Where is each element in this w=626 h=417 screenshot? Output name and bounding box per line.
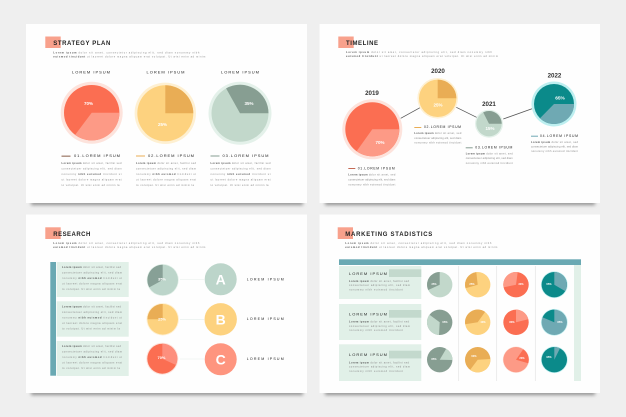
pie row 3 column 2: 60% — [471, 354, 477, 358]
panel: marketing statistics — [320, 214, 600, 393]
pie row 2 column 3 — [503, 310, 529, 335]
text box 1: consectetuer adipiscing elit, sed diam — [62, 270, 122, 274]
letter circle A — [205, 263, 237, 295]
intro text: Lorem ipsum dolor sit amet, consectetur adipiscing elit, sed diam nonummy nibh — [346, 50, 493, 54]
text box 1: nonummy nibh euismod tincidunt ut — [62, 276, 122, 280]
pie row 1 column 4 — [541, 271, 568, 298]
column text 3 — [210, 153, 271, 187]
intro text — [346, 50, 498, 58]
table row label 2: consectetuer adipiscing elit, sed diam — [349, 324, 410, 328]
pie chart: 2022 — [532, 82, 576, 126]
pie chart: 2019: 70% — [375, 140, 385, 145]
pie chart: 35%: 35% — [244, 101, 254, 106]
heading accent — [338, 227, 353, 239]
column text 2 — [136, 153, 197, 187]
pie row 3 column 3: 20% — [519, 356, 525, 360]
timeline text 2020: consectetuer adipiscing elit, sed diam — [414, 136, 461, 140]
column text 2: consectetuer adipiscing elit, sed diam — [136, 166, 196, 170]
timeline text 2021 — [466, 146, 513, 165]
text box 1: ut laoreet dolore magna aliquam erat — [62, 281, 122, 285]
table row label 3: nonummy nibh euismod tincidunt — [349, 369, 403, 373]
column text 1: ut laoreet dolore magna aliquam erat — [62, 178, 122, 182]
column text 3: 03.LOREM IPSUM — [222, 153, 268, 158]
pie row 2 column 4 — [541, 309, 568, 336]
pie chart: 35% — [208, 82, 272, 145]
year 2020: 2020 — [431, 68, 445, 75]
column heading 1: LOREM IPSUM — [72, 70, 110, 74]
pie row 1 column 4: 65% — [546, 282, 552, 286]
timeline text 2020: nonummy nibh euismod tincidunt — [414, 140, 462, 144]
heading accent — [45, 227, 61, 239]
column text 2: ut laoreet dolore magna aliquam erat — [136, 178, 196, 182]
pie chart C: 70% — [157, 355, 166, 360]
pie row 1 column 1 — [427, 272, 452, 297]
row label B: LOREM IPSUM — [247, 317, 284, 321]
row label C: LOREM IPSUM — [247, 357, 284, 361]
pie row 2 column 4: 85% — [557, 320, 563, 324]
panel: timeline — [320, 24, 600, 203]
timeline text 2020: 02.LOREM IPSUM — [424, 125, 461, 129]
year 2022: 2022 — [548, 72, 562, 80]
row label A: LOREM IPSUM — [247, 278, 284, 282]
pie row 3 column 4 — [541, 346, 568, 373]
pie chart: 2020 — [417, 78, 458, 119]
intro text — [345, 241, 497, 249]
timeline text 2019: Lorem ipsum dolor sit amet, sed — [348, 172, 396, 176]
timeline text 2021: consectetuer adipiscing elit, sed diam — [466, 156, 513, 160]
pie chart A — [147, 264, 179, 296]
column heading 3: LOREM IPSUM — [221, 70, 259, 74]
pie chart A: 35% — [158, 276, 166, 282]
timeline text 2022 — [531, 134, 579, 153]
intro text: Lorem ipsum dolor sit amet, consectetur adipiscing elit, sed diam nonummy nibh — [345, 241, 492, 245]
column text 1: consectetuer adipiscing elit, sed diam — [62, 166, 122, 170]
pie row 1 column 1: 35% — [431, 282, 437, 286]
column text 3: consectetuer adipiscing elit, sed diam — [210, 166, 270, 170]
pie chart: 25%: 25% — [158, 122, 167, 127]
timeline text 2020 — [414, 125, 462, 144]
intro text: Lorem ipsum dolor sit amet, consectetur adipiscing elit, sed diam nonummy nibh — [53, 50, 200, 54]
heading accent — [45, 36, 61, 48]
text box 3: ut laoreet dolore magna aliquam erat — [62, 360, 122, 364]
table row label 1: Lorem ipsum dolor sit amet, facilisi sed — [349, 279, 410, 283]
table row label 3: consectetuer adipiscing elit, sed diam — [349, 364, 410, 368]
timeline text 2022: nonummy nibh euismod tincidunt — [531, 149, 578, 153]
pie row 2 column 3: 80% — [509, 320, 515, 324]
column text 1: Lorem ipsum dolor sit amet, facilisi sed — [62, 161, 122, 165]
pie row 2 column 1: 65% — [442, 320, 448, 324]
pie row 3 column 2 — [465, 347, 490, 372]
column heading 2: LOREM IPSUM — [146, 70, 184, 74]
pie row 1 column 3: 30% — [518, 282, 524, 286]
timeline text 2019: nonummy nibh euismod tincidunt — [348, 182, 396, 186]
table row label 1: LOREM IPSUM — [349, 271, 387, 276]
panel: strategy plan — [26, 24, 307, 203]
column text 2: nonummy nibh euismod tincidunt ut — [136, 172, 196, 176]
heading: research: RESEARCH — [53, 232, 90, 238]
pie row 1 column 2: 25% — [469, 282, 475, 286]
pie grid — [427, 271, 568, 373]
pie row 2 column 1 — [427, 310, 452, 335]
year 2021: 2021 — [482, 101, 496, 108]
table row label 1 — [339, 266, 421, 299]
text box 2: nonummy nibh euismod tincidunt ut — [62, 315, 122, 319]
column text 3: ut laoreet dolore magna aliquam erat — [210, 178, 271, 182]
table header bar — [339, 259, 581, 265]
table row label 3: Lorem ipsum dolor sit amet, facilisi sed — [349, 360, 410, 364]
column text 1: 01.LOREM IPSUM — [74, 153, 120, 158]
timeline text 2022: 04.LOREM IPSUM — [540, 134, 578, 138]
table row label 2: Lorem ipsum dolor sit amet, facilisi sed — [349, 320, 410, 324]
text box 2: consectetuer adipiscing elit, sed diam — [62, 310, 122, 314]
text box 2: ut laoreet dolore magna aliquam erat — [62, 321, 122, 325]
pie row 3 column 4: 95% — [546, 355, 552, 359]
heading accent — [338, 36, 354, 48]
intro text: Lorem ipsum dolor sit amet, consectetur adipiscing elit, sed diam nonummy nibh — [53, 241, 200, 245]
pie chart: 70%: 70% — [84, 101, 93, 106]
text box 1: Lorem ipsum dolor sit amet, facilisi sed — [62, 265, 122, 269]
table row label 3: LOREM IPSUM — [349, 352, 387, 357]
vertical bar — [50, 262, 56, 376]
panel: research — [26, 214, 307, 393]
text box 3 — [57, 341, 129, 376]
timeline text 2021: nonummy nibh euismod tincidunt — [466, 161, 513, 165]
timeline text 2021: 03.LOREM IPSUM — [475, 146, 512, 150]
year 2019: 2019 — [365, 90, 379, 97]
table right strip — [574, 265, 581, 381]
table row label 2 — [339, 304, 421, 340]
table row label 1: nonummy nibh euismod tincidunt — [349, 288, 403, 292]
heading: timeline: TIMELINE — [346, 41, 378, 47]
text box 3: consectetuer adipiscing elit, sed diam — [62, 350, 122, 354]
timeline text 2022: consectetuer adipiscing elit, sed diam — [531, 144, 578, 148]
timeline text 2020: Lorem ipsum dolor sit amet, sed — [414, 131, 462, 135]
text box 1: to volutpat. Ut wisi enim ad minim la — [62, 287, 121, 291]
table row label 2: LOREM IPSUM — [349, 312, 387, 316]
row connectors — [180, 280, 204, 359]
connector lines — [401, 107, 532, 119]
table row label 2: nonummy nibh euismod tincidunt — [349, 328, 403, 332]
timeline text 2019: consectetuer adipiscing elit, sed diam — [348, 178, 395, 182]
timeline text 2019: 01.LOREM IPSUM — [358, 167, 395, 171]
pie chart B — [146, 303, 179, 335]
column text 3: Lorem ipsum dolor sit amet, facilisi sed — [210, 161, 271, 165]
text box 3: nonummy nibh euismod tincidunt ut — [62, 355, 122, 359]
table row label 1: consectetuer adipiscing elit, sed diam — [349, 283, 410, 287]
letter circle C — [205, 343, 237, 375]
pie chart: 70% — [61, 82, 123, 144]
pie row 3 column 3 — [503, 346, 529, 373]
pie chart: 2021 — [475, 110, 503, 138]
column text 1: to volutpat. Ut wisi enim ad minim la — [62, 183, 120, 187]
letter circle A: A — [216, 272, 226, 288]
pie row 2 column 2: 40% — [480, 320, 486, 324]
letter circle C: C — [216, 352, 226, 368]
timeline text 2021: Lorem ipsum dolor sit amet, sed — [466, 152, 513, 156]
text box 1 — [57, 262, 129, 297]
pie chart B: 25% — [158, 316, 166, 322]
column text 2: 02.LOREM IPSUM — [148, 153, 194, 158]
text box 2: Lorem ipsum dolor sit amet, facilisi sed — [62, 304, 122, 308]
text box 3: Lorem ipsum dolor sit amet, facilisi sed — [62, 344, 122, 348]
timeline text 2022: Lorem ipsum dolor sit amet, sed — [531, 140, 579, 144]
timeline text 2019 — [348, 167, 396, 186]
pie row 1 column 2 — [465, 272, 490, 297]
pie row 2 column 2 — [465, 310, 490, 335]
pie row 3 column 1 — [427, 347, 452, 372]
letter circle B — [204, 303, 237, 335]
heading: strategy plan: STRATEGY PLAN — [53, 41, 110, 47]
pie chart: 2021: 15% — [485, 126, 495, 131]
pie chart: 25% — [135, 83, 196, 144]
intro text: euismod tincidunt ut laoreet dolore magna aliquam erat volutpat. Ut wisi enim ad minim — [53, 245, 205, 249]
intro text: euismod tincidunt ut laoreet dolore magna aliquam erat volutpat. Ut wisi enim ad minim — [346, 54, 498, 58]
table row label 3 — [339, 344, 421, 381]
heading: marketing stadistics: MARKETING STADISTICS — [345, 232, 432, 238]
pie chart: 2022: 65% — [555, 96, 566, 102]
text box 2: to volutpat. Ut wisi enim ad minim la — [62, 326, 121, 330]
text box 3: to volutpat. Ut wisi enim ad minim la — [62, 366, 121, 370]
pie chart: 2019 — [342, 99, 402, 159]
letter circle B: B — [216, 312, 226, 328]
intro text: euismod tincidunt ut laoreet dolore magna aliquam erat volutpat. Ut wisi enim ad minim — [53, 54, 205, 58]
intro text — [53, 241, 205, 249]
pie chart: 2020: 25% — [433, 102, 443, 108]
column text 2: to volutpat. Ut wisi enim ad minim la — [136, 183, 195, 187]
column text 2: Lorem ipsum dolor sit amet, facilisi sed — [136, 161, 197, 165]
column text 3: to volutpat. Ut wisi enim ad minim la — [210, 183, 269, 187]
intro text — [53, 50, 205, 58]
text box 2 — [57, 301, 129, 337]
pie chart C — [146, 343, 178, 375]
pie row 3 column 1: 85% — [431, 357, 437, 361]
intro text: euismod tincidunt ut laoreet dolore magna aliquam erat volutpat. Ut wisi enim ad minim — [345, 245, 497, 249]
column text 1 — [62, 153, 122, 187]
pie row 1 column 3 — [503, 272, 529, 297]
column text 1: nonummy nibh euismod tincidunt ut — [62, 172, 122, 176]
column text 3: nonummy nibh euismod tincidunt ut — [210, 172, 271, 176]
